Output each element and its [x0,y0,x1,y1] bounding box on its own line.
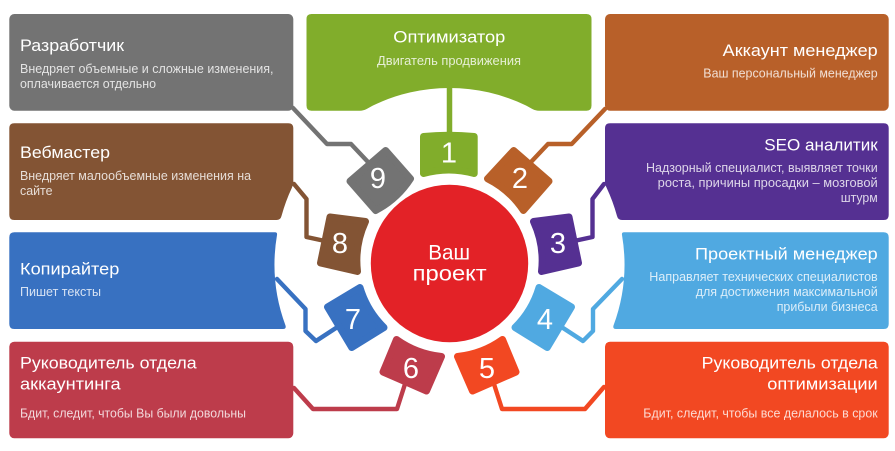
center circle: your project: Ваш [428,240,470,264]
panel: account manager [605,14,889,111]
connector and tile 3: 3 [550,228,566,260]
panel: developer: оплачивается отдельно [20,77,156,91]
connector and tile 2: 2 [512,163,528,195]
connector and tile 7 [277,279,384,348]
connector and tile 8: 8 [332,228,348,260]
connector and tile 4: 4 [537,304,553,336]
panel: project manager: прибыли бизнеса [777,300,878,314]
connector and tile 2 [488,109,605,210]
connector and tile 9 [293,108,410,210]
panel: SEO analyst: штурм [841,191,878,205]
panel: account manager: Ваш персональный менеджер [703,67,878,81]
connector and tile 6 [294,340,442,409]
panel: head of optimization [605,342,889,438]
center circle: your project [371,185,528,342]
connector and tile 8 [294,184,366,272]
panel: optimizer: Оптимизатор [393,28,505,47]
panel: project manager [613,232,889,329]
connector and tile 9: 9 [370,163,386,195]
connector and tile 1: 1 [441,138,457,170]
panel: developer: Разработчик [20,36,125,55]
panel: project manager: для достижения максимальной [696,285,878,299]
panel: account manager: Аккаунт менеджер [723,41,878,60]
panel: webmaster [9,123,293,220]
panel: copywriter [9,232,286,329]
panel: optimizer: Двигатель продвижения [377,54,521,68]
panel: SEO analyst: Надзорный специалист, выявляет точки [646,161,878,175]
panel: developer: Внедряет объемные и сложные изменения, [20,62,274,76]
panel: copywriter: Пишет тексты [20,285,101,299]
panel: optimizer [306,14,592,111]
panel: webmaster: Вебмастер [20,143,110,162]
connector and tile 6: 6 [403,353,419,385]
connector and tile 1 [424,86,474,174]
panel: SEO analyst [605,123,889,220]
connector and tile 7: 7 [345,304,361,336]
panel: head of optimization: оптимизации [767,374,878,393]
panel: head of optimization: Бдит, следит, чтобы все делалось в срок [643,407,878,421]
panel: head of accounting: аккаунтинга [20,374,121,393]
center circle: your project: проект [413,262,487,286]
panel: project manager: Направляет технических специалистов [649,270,878,284]
panel: webmaster: Внедряет малообъемные изменения на [20,169,251,183]
connector and tile 4 [515,279,622,348]
panel: head of optimization: Руководитель отдела [702,353,878,372]
connector and tile 5: 5 [479,353,495,385]
panel: SEO analyst: SEO аналитик [764,136,878,155]
panel: head of accounting: Руководитель отдела [20,353,197,372]
panel: copywriter: Копирайтер [20,259,119,278]
panel: head of accounting [9,342,293,438]
panel: project manager: Проектный менеджер [695,244,878,263]
panel: head of accounting: Бдит, следит, чтобы Вы были довольны [20,407,246,421]
connector and tile 3 [534,184,604,272]
panel: SEO analyst: роста, причины просадки – мозговой [658,176,878,190]
panel: developer [9,14,293,111]
connector and tile 5 [458,340,604,409]
panel: webmaster: сайте [20,184,53,198]
